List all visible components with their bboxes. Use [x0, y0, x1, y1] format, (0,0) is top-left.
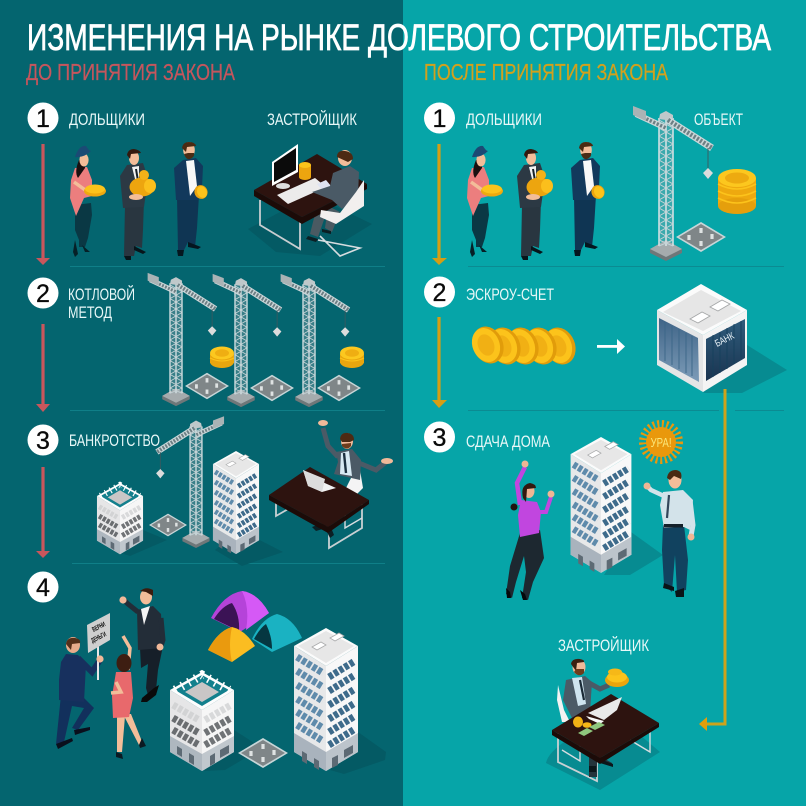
man in navy suit with placard: ДЕНЬГИ	[90, 631, 108, 645]
left step 4 number badge: 4	[36, 574, 50, 602]
arrow: coins to bank	[597, 339, 625, 354]
icon: banknotes	[578, 722, 605, 736]
right step 3 number badge	[424, 422, 455, 452]
illustration: abandoned site with buildings	[97, 416, 283, 566]
arrow: left step 1 to 2	[36, 144, 50, 265]
label: object: ОБЪЕКТ	[694, 110, 743, 129]
illustration: finished building	[571, 437, 663, 575]
label: escrow account: ЭСКРОУ-СЧЕТ	[466, 285, 554, 304]
man in navy suit with placard: ВЕРНИ	[91, 621, 107, 634]
illustration: bank building	[657, 284, 787, 393]
heading: after the law: ПОСЛЕ ПРИНЯТИЯ ЗАКОНА	[424, 59, 669, 85]
label: boiler method: КОТЛОВОЙ	[68, 285, 135, 304]
callout: hurrah badge: УРА!	[650, 435, 672, 450]
label: developer: ЗАСТРОЙЩИК	[558, 636, 649, 655]
man in navy suit with placard	[56, 613, 110, 749]
icon: coins on desk	[573, 716, 592, 728]
illustration: jumping woman	[506, 460, 554, 600]
icon: coin stack	[718, 169, 756, 214]
woman in pink dress	[111, 636, 146, 759]
illustration: developer with raised hands at desk	[269, 420, 393, 548]
right step 1 number badge	[424, 102, 455, 134]
left step 1 number badge	[28, 102, 58, 134]
right step 3 number badge: 3	[433, 424, 446, 452]
illustration: shareholders holding coins	[467, 142, 607, 260]
label: shareholders: ДОЛЬЩИКИ	[69, 110, 145, 129]
heading: before the law: ДО ПРИНЯТИЯ ЗАКОНА	[26, 59, 236, 85]
teal tent	[252, 614, 302, 652]
left step 1 number badge: 1	[36, 105, 50, 133]
arrow: bank payment to developer	[699, 389, 725, 731]
left step 2 number badge	[28, 278, 58, 308]
right step 2 number badge: 2	[433, 279, 446, 307]
panel: left background (before the law)	[0, 0, 403, 806]
illustration: tents	[208, 591, 302, 662]
panel: right background (after the law)	[403, 0, 806, 806]
illustration: developer receiving coins at desk	[546, 659, 660, 790]
illustration: shareholders holding coins	[70, 142, 210, 260]
illustration: happy man	[644, 470, 694, 597]
man in black suit	[119, 588, 164, 702]
left step 3 number badge	[28, 424, 58, 456]
left step 3 number badge: 3	[36, 427, 50, 455]
label: house handover: СДАЧА ДОМА	[466, 432, 550, 451]
label: developer: ЗАСТРОЙЩИК	[267, 110, 357, 129]
label: boiler method: МЕТОД	[68, 303, 112, 322]
right step 1 number badge: 1	[433, 105, 446, 133]
arrow: right step 1 to 2	[432, 144, 447, 265]
label: bankruptcy: БАНКРОТСТВО	[69, 431, 160, 450]
left step 2 number badge: 2	[36, 280, 50, 308]
arrow: left step 2 to 3	[36, 324, 50, 412]
illustration: deserted buildings	[170, 628, 386, 774]
arrow: right step 2 to 3	[432, 317, 447, 408]
illustration: developer at desk	[248, 144, 372, 256]
label: shareholders: ДОЛЬЩИКИ	[466, 110, 542, 129]
icon: coins in hand	[605, 668, 629, 687]
right step 2 number badge	[424, 276, 455, 308]
illustration: three cranes with foundations and coins	[148, 273, 364, 407]
illustration: bank building: БАНК	[713, 331, 736, 350]
illustration: crane, coins and foundation	[633, 106, 756, 261]
callout: hurrah badge	[643, 424, 679, 460]
arrow: left step 3 to 4	[36, 467, 50, 558]
icon: coin row	[467, 322, 581, 369]
label: boiler method	[68, 285, 135, 322]
yellow tent	[208, 627, 255, 662]
illustration: protesters	[56, 588, 164, 759]
purple tent	[211, 591, 269, 632]
left step 4 number badge	[28, 572, 58, 602]
